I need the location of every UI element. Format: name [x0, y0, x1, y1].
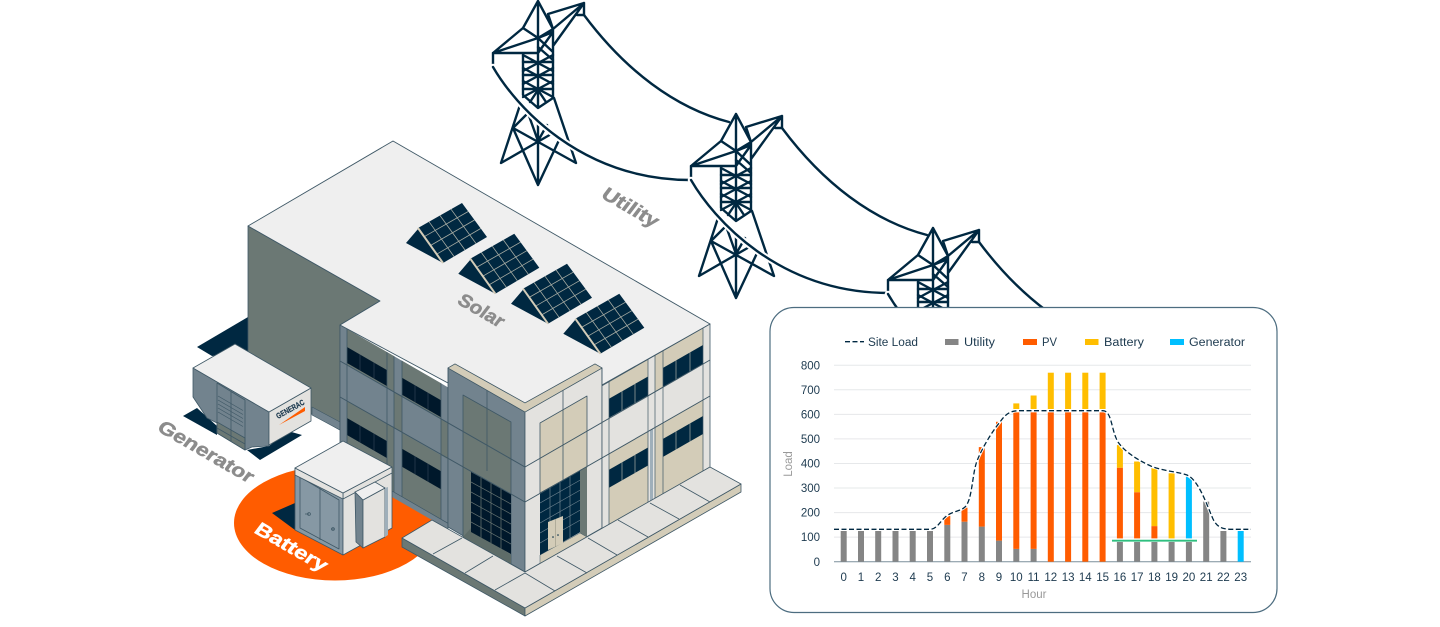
windows: [347, 346, 441, 489]
generator vents: [218, 396, 243, 426]
legend: PV: [1023, 337, 1057, 349]
x axis labels: 4: [909, 572, 916, 584]
panel 4: [563, 294, 644, 354]
glass curtain wall left: [471, 472, 511, 554]
cabinet right face: [343, 467, 392, 555]
green threshold line: [1112, 540, 1197, 542]
y axis labels: 300: [801, 483, 820, 495]
x axis labels: 14: [1079, 572, 1092, 584]
y axis labels: 0: [814, 557, 820, 569]
axis title: Load: Load: [783, 451, 795, 477]
x axis labels: 7: [961, 572, 968, 584]
legend: generator: Generator: [1189, 337, 1245, 349]
right wing windows: [609, 345, 703, 488]
legend: generator: [1170, 337, 1245, 349]
solar panels: [406, 203, 644, 354]
parapet trim: [448, 364, 602, 412]
panel 3: [511, 264, 592, 324]
x axis labels: 12: [1044, 572, 1057, 584]
site load curve: [834, 411, 1251, 529]
legend: battery: Battery: [1104, 337, 1144, 349]
PV bars: [944, 412, 1157, 562]
y axis labels: 600: [801, 410, 820, 422]
entrance glass: [540, 470, 580, 555]
side enclosure: [355, 492, 363, 548]
x axis labels: 21: [1200, 572, 1213, 584]
front pillar left face: [448, 368, 525, 572]
tower 1: [493, 1, 729, 185]
x axis labels: 5: [927, 572, 933, 584]
sidewalk: [402, 467, 741, 616]
panel 1: [406, 203, 487, 263]
cabinet doors face: [295, 468, 343, 555]
x axis labels: [840, 572, 1247, 584]
generator top: [193, 344, 311, 412]
y axis labels: 100: [801, 532, 820, 544]
y axis labels: [801, 360, 820, 569]
chart card: [770, 308, 1277, 612]
label: Generator: Generator: [153, 417, 259, 487]
door handles: [305, 514, 334, 529]
x axis labels: 6: [944, 572, 951, 584]
roof: [248, 141, 710, 403]
x axis labels: 10: [1010, 572, 1023, 584]
legend: PV: PV: [1042, 337, 1057, 349]
x axis labels: 15: [1096, 572, 1109, 584]
label: Battery: Battery: [250, 519, 333, 576]
generator unit: [193, 344, 311, 450]
generator bars: [1186, 477, 1244, 562]
orange battery highlight: [234, 466, 436, 580]
chart gridlines and axis: [834, 365, 1251, 562]
x axis labels: 13: [1062, 572, 1074, 584]
x axis labels: 3: [892, 572, 899, 584]
legend: utility: [945, 337, 995, 349]
legend: utility: Utility: [964, 337, 995, 349]
left wing wall: [340, 325, 448, 529]
battery cabinet: [295, 441, 392, 555]
label: Solar: Solar: [453, 290, 509, 332]
chart legend: [845, 337, 1245, 349]
power transmission towers: [493, 1, 1124, 412]
Generac logo: [275, 398, 306, 425]
x axis labels: 19: [1165, 572, 1178, 584]
generator side: [193, 368, 269, 450]
door: [548, 516, 563, 550]
x axis labels: 9: [996, 572, 1002, 584]
x axis labels: 23: [1234, 572, 1247, 584]
battery shadow: [272, 503, 295, 530]
x axis labels: 22: [1217, 572, 1230, 584]
panel 2: [458, 234, 539, 294]
legend: site load: [845, 337, 918, 349]
x axis labels: 2: [875, 572, 881, 584]
y axis labels: 200: [801, 508, 820, 520]
right wing wall: [602, 324, 710, 529]
floor lines: [340, 360, 710, 502]
legend: battery: [1085, 337, 1144, 349]
legend: site load: Site Load: [868, 337, 918, 349]
y axis labels: 400: [801, 459, 820, 471]
tower 3: [888, 228, 1124, 412]
tower 2: [691, 114, 927, 298]
building: [248, 141, 710, 572]
x axis labels: 16: [1114, 572, 1126, 584]
x axis labels: 11: [1028, 572, 1040, 584]
generator end: [269, 388, 311, 445]
x axis labels: 0: [840, 572, 847, 584]
cabinet top: [295, 441, 392, 493]
y axis labels: 800: [801, 360, 820, 372]
x axis labels: 8: [979, 572, 985, 584]
axis title: Hour: Hour: [1022, 589, 1047, 601]
y axis labels: 500: [801, 434, 820, 446]
battery bars: [1013, 373, 1175, 538]
y axis labels: 700: [801, 385, 820, 397]
utility bars: [841, 502, 1226, 562]
x axis labels: 17: [1131, 572, 1143, 584]
front pillar right face: [525, 368, 602, 572]
label: Utility: Utility: [597, 184, 664, 232]
Generac logo: GENERAC: [275, 398, 306, 421]
generator ground shadows: [183, 317, 302, 460]
back wall: [248, 226, 380, 430]
x axis labels: 1: [858, 572, 864, 584]
x axis labels: 20: [1183, 572, 1195, 584]
x axis labels: 18: [1148, 572, 1161, 584]
